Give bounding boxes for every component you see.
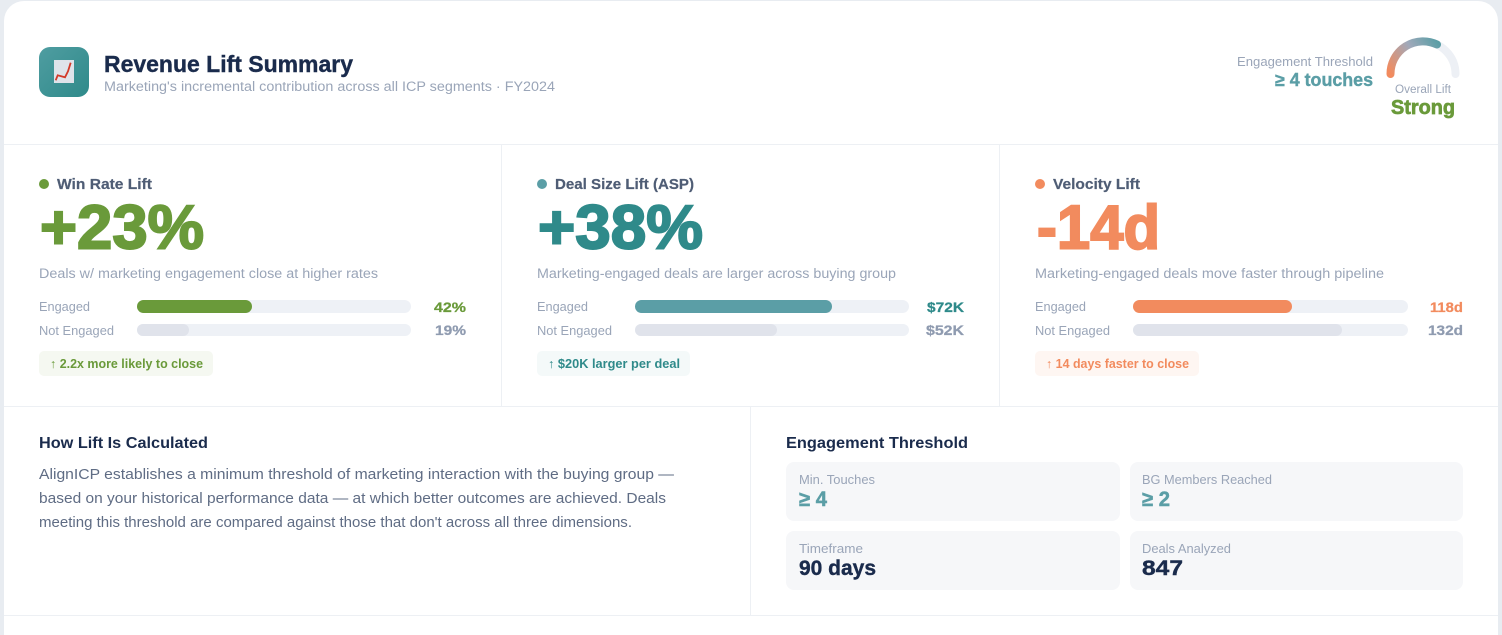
bar: engaged 118d [1035,299,1463,315]
header [39,47,556,97]
gauge: overall lift: Overall Lift [1395,84,1452,96]
gauge: overall lift [1390,41,1456,119]
bar: not engaged $52K: Not Engaged [537,324,612,338]
bar: engaged $72K: $72K [927,299,964,315]
paragraph: based on your historical performance data — at which better outcomes are achieved. Deals [39,491,666,507]
bar: not engaged 132d: Not Engaged [1035,324,1110,338]
engagement threshold summary: Engagement Threshold [1237,54,1373,69]
callout: ↑ $20K larger per deal [548,357,680,371]
bar: engaged $72K [537,299,964,315]
callout [1035,351,1199,376]
callout [537,351,690,376]
paragraph: AlignICP establishes a minimum threshold of marketing interaction with the buying group — [39,467,675,483]
gauge: overall lift: Strong [1391,97,1455,119]
stat: deals analyzed: Deals Analyzed [1142,542,1231,556]
heading: Engagement Threshold [786,435,968,452]
stat: deals analyzed [1130,531,1463,590]
metric: -14d: -14d [1037,194,1160,262]
stat: timeframe: 90 days [799,557,876,580]
callout: ↑ 2.2x more likely to close [50,357,203,371]
icon: chart tile [39,47,89,97]
engagement threshold summary [1237,54,1373,90]
title: Revenue Lift Summary [104,51,353,77]
paragraph [39,467,675,531]
stat: min touches [786,462,1120,521]
description: Marketing-engaged deals move faster through pipeline [1035,266,1384,281]
stat: deals analyzed: 847 [1142,557,1183,580]
panel: deal size lift [537,177,964,376]
stat: bg members: ≥ 2 [1142,488,1170,511]
bar: engaged 42%: Engaged [39,300,90,314]
panel: how lift is calculated [39,435,675,531]
stat: timeframe [786,531,1120,590]
stat: bg members [1130,462,1463,521]
callout [39,351,213,376]
stat: bg members: BG Members Reached [1142,473,1272,487]
bar: not engaged 132d [1035,322,1463,338]
paragraph: meeting this threshold are compared against those that don't across all three dimensions. [39,515,632,531]
description: Deals w/ marketing engagement close at higher rates [39,266,378,281]
bar: engaged 42%: 42% [434,299,467,315]
bar: not engaged 19%: Not Engaged [39,324,114,338]
heading: velocity: Velocity Lift [1053,177,1140,193]
engagement threshold summary: ≥ 4 touches [1275,70,1373,90]
bar: not engaged 19% [39,322,467,338]
metric: +38%: +38% [538,194,703,262]
panel: engagement threshold [786,435,1463,590]
stat: timeframe: Timeframe [799,542,863,556]
metric: +23%: +23% [40,194,204,262]
panel: velocity lift [1035,177,1463,376]
bar: not engaged $52K [537,322,964,338]
bar: engaged 42% [39,299,467,315]
heading: win rate: Win Rate Lift [57,177,152,193]
heading: How Lift Is Calculated [39,435,208,452]
stat: min touches: Min. Touches [799,473,875,487]
bar: engaged 118d: 118d [1430,299,1463,315]
subtitle: Marketing's incremental contribution across all ICP segments · FY2024 [104,79,556,94]
description: Marketing-engaged deals are larger across buying group [537,266,896,281]
panel: win rate lift [39,177,467,376]
bar: engaged 118d: Engaged [1035,300,1086,314]
heading: deal size: Deal Size Lift (ASP) [555,177,694,193]
bar: not engaged 132d: 132d [1428,322,1463,338]
callout: ↑ 14 days faster to close [1046,357,1189,371]
bar: not engaged $52K: $52K [926,322,964,338]
bar: engaged $72K: Engaged [537,300,588,314]
bar: not engaged 19%: 19% [435,322,467,338]
stat: min touches: ≥ 4 [799,488,827,511]
